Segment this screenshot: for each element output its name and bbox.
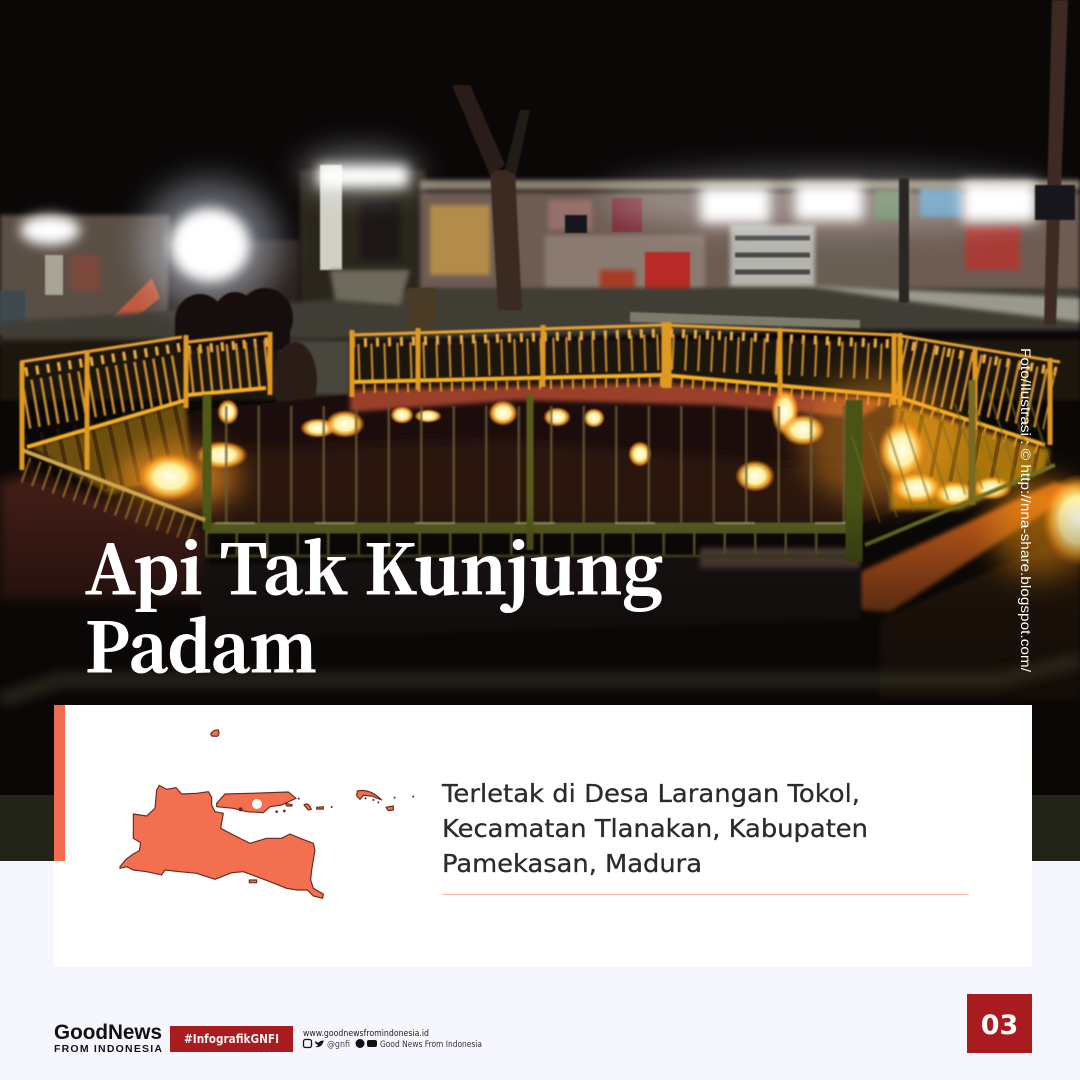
photo: flames (120, 375, 1080, 580)
icon: youtube (367, 1040, 377, 1047)
photo credit: Foto/Ilustrasi : © http://nna-share.blogspot.com/ (1018, 348, 1034, 672)
footer: hashtag badge: #InfografikGNFI (184, 1032, 279, 1046)
photo: night view of the eternal flame enclosure (0, 0, 1080, 795)
footer: hashtag badge (170, 1026, 293, 1052)
footer: GoodNews logo: FROM INDONESIA (54, 1043, 162, 1055)
photo: market stalls (0, 165, 1080, 335)
photo: ground (0, 270, 1080, 400)
title (85, 517, 663, 692)
location description: Terletak di Desa Larangan Tokol, (441, 779, 860, 808)
photo: dark fade at bottom (0, 500, 1080, 795)
footer: website and social links: @gnfi (327, 1040, 350, 1050)
footer: website and social links: www.goodnewsfromindonesia.id (303, 1029, 429, 1039)
title: Padam (85, 595, 317, 692)
photo: enclosure floor and wall (0, 383, 1080, 700)
dark band behind card (0, 795, 1080, 861)
photo: ledge outline (0, 660, 1080, 700)
page number (967, 994, 1032, 1053)
icon: facebook (356, 1039, 364, 1048)
location description: Pamekasan, Madura (442, 849, 702, 878)
panel: location card (54, 705, 1032, 966)
photo: front fence, green railings (22, 380, 1055, 562)
photo: silhouettes of people (175, 288, 436, 418)
icon: instagram (304, 1040, 312, 1048)
page number: 03 (981, 1010, 1018, 1041)
footer: GoodNews logo (54, 1020, 162, 1055)
location description (441, 779, 868, 878)
footer: website and social links: Good News From Indonesia (380, 1040, 482, 1050)
title: Api Tak Kunjung (85, 517, 663, 614)
photo: white lamp glows (20, 150, 1060, 311)
icon: twitter (315, 1040, 324, 1047)
footer: GoodNews logo: GoodNews (54, 1020, 162, 1044)
footer: website and social links (303, 1029, 482, 1050)
photo: tree and poles (452, 0, 1075, 325)
map: East Java and Madura (120, 730, 414, 898)
photo: back fence, orange railings (20, 322, 1060, 470)
location description: Kecamatan Tlanakan, Kabupaten (442, 814, 868, 843)
